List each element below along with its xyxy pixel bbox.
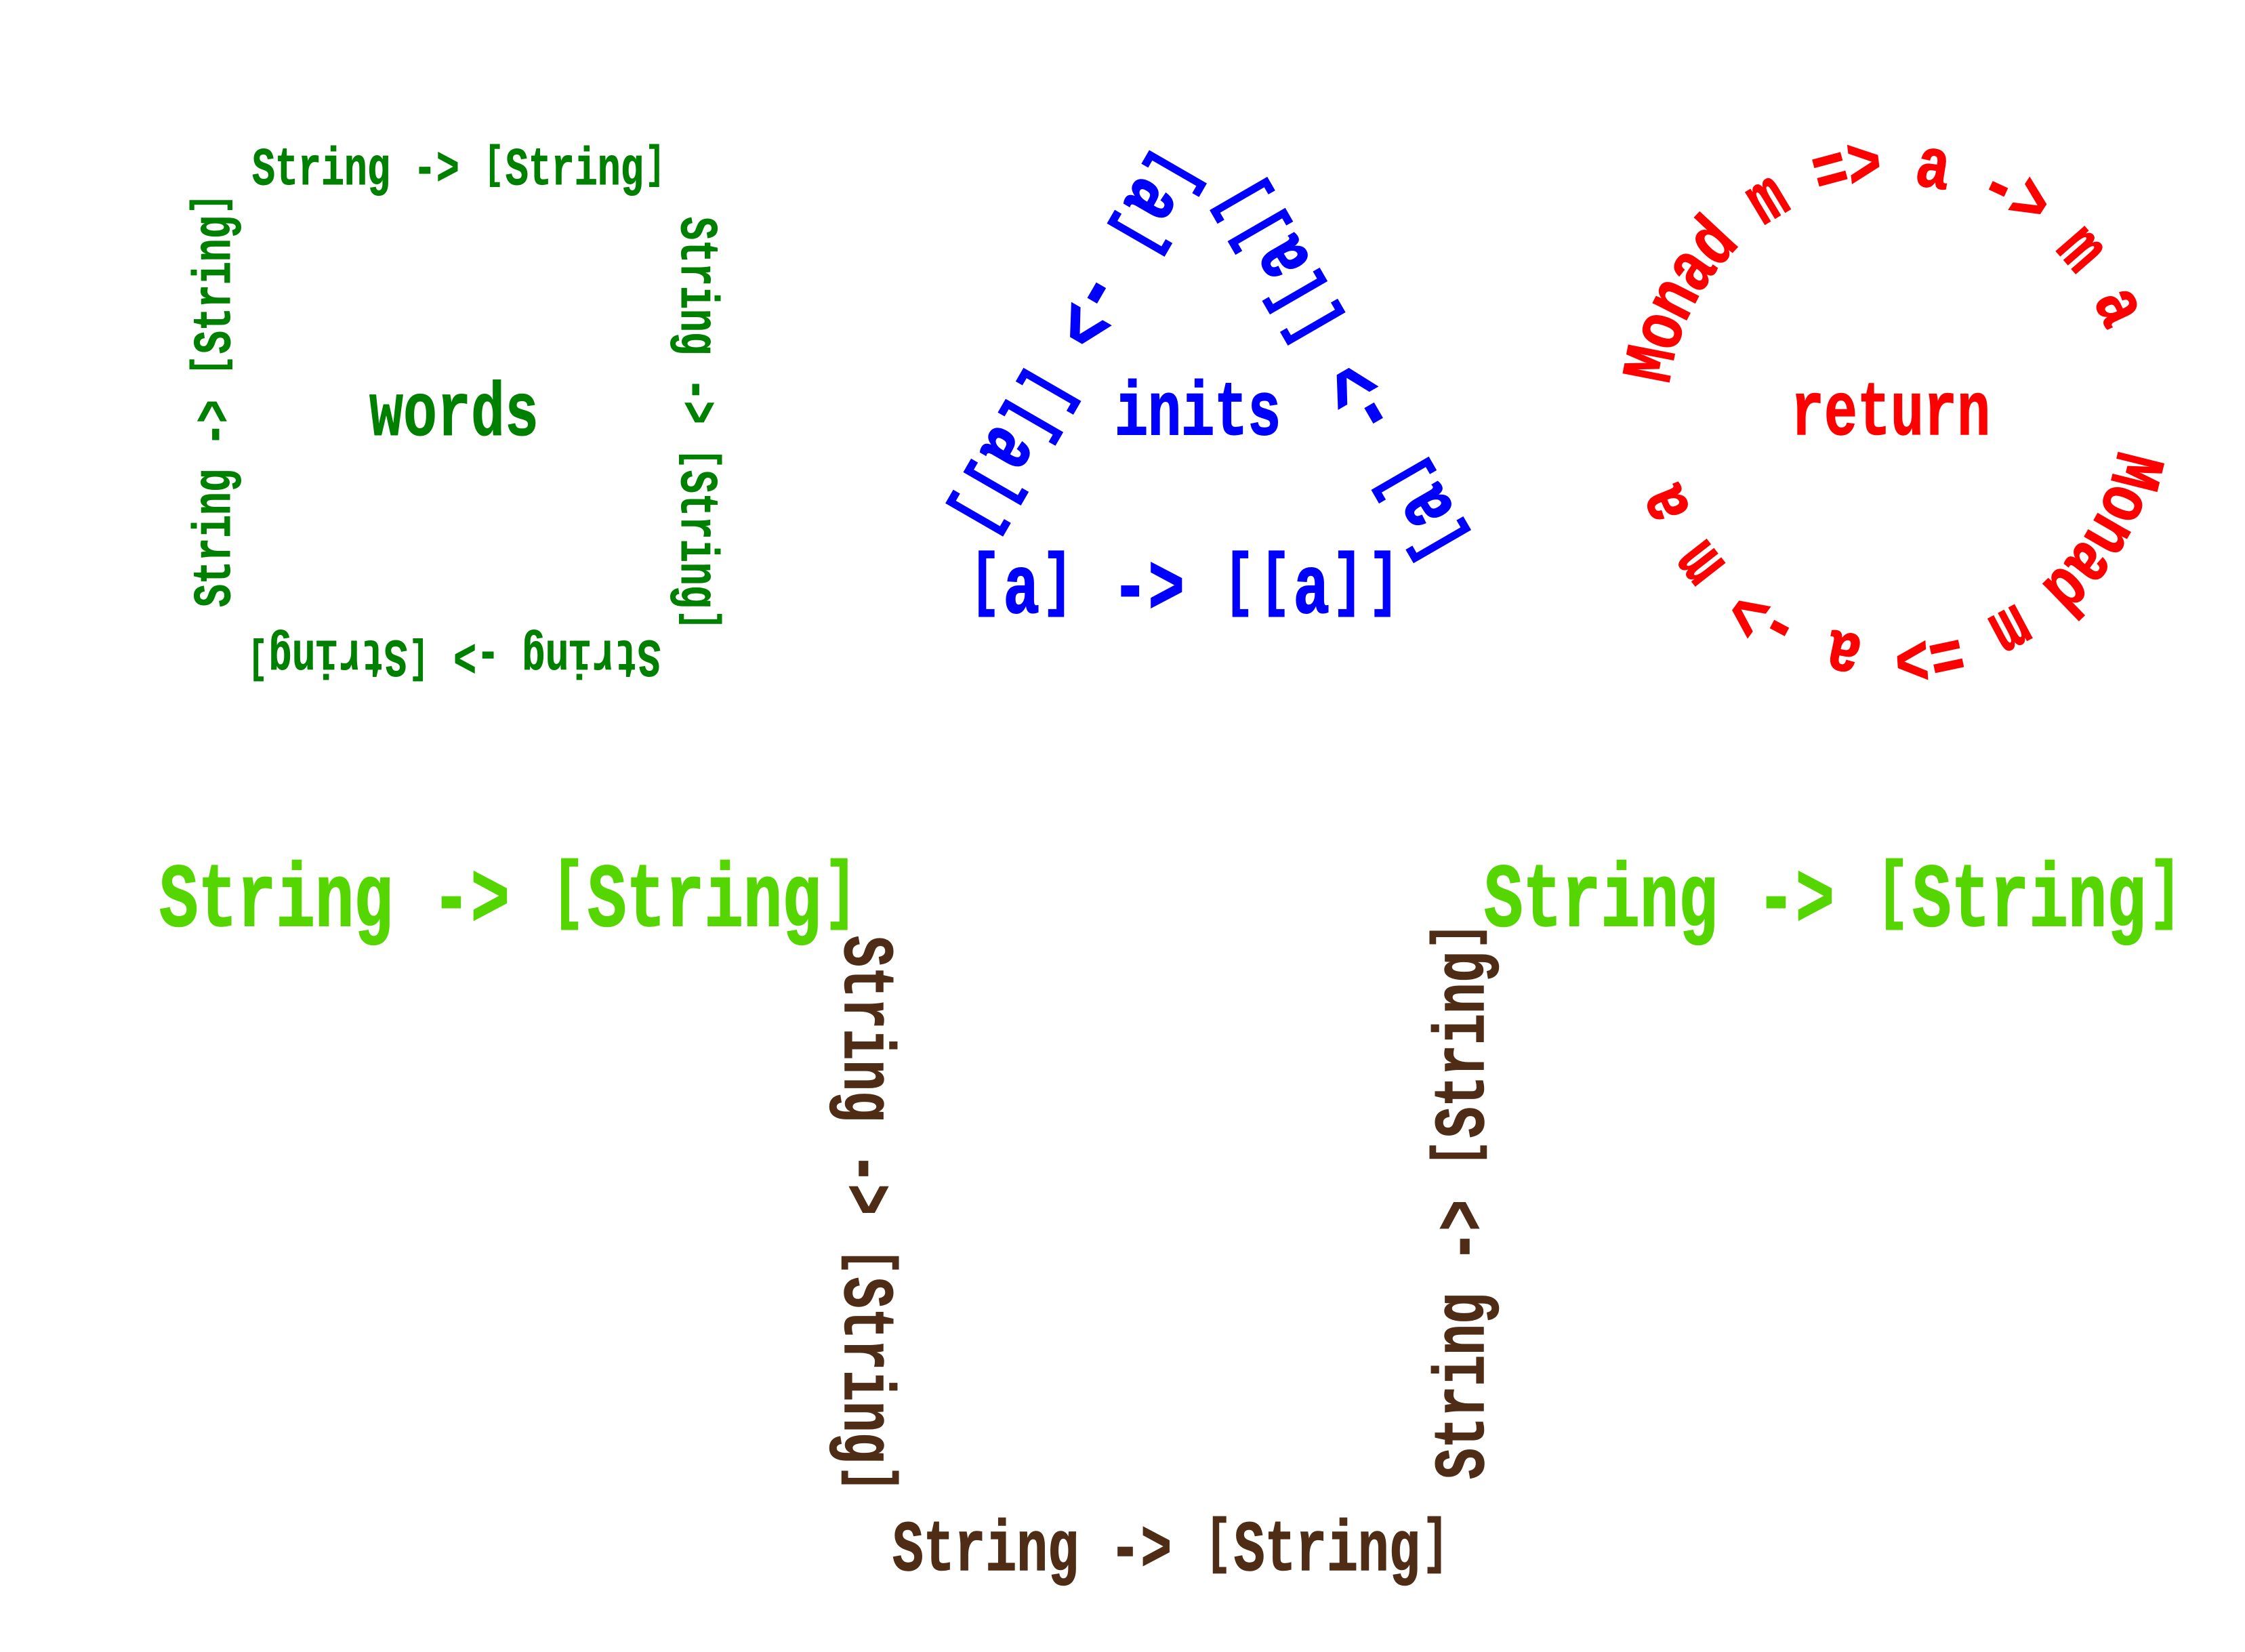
upper arc label: > <box>1843 125 1887 209</box>
left side label: a <box>1100 161 1200 239</box>
left side label: [ <box>989 388 1073 454</box>
lower arc label: m <box>1976 585 2044 672</box>
bottom side label: ] <box>1042 544 1073 623</box>
centre label: inits: inits <box>1115 371 1281 457</box>
right side label: [ <box>1272 290 1355 356</box>
brown horizontal label: ] <box>1422 1511 1449 1579</box>
left side label: [ <box>1007 357 1091 423</box>
upper arc label: = <box>1804 131 1858 218</box>
bottom side label: [ <box>409 634 428 684</box>
right side label: String -> <box>665 217 726 424</box>
upper arc label: m <box>2038 211 2122 289</box>
brown ascending label: String -> <box>1424 1200 1505 1479</box>
panel: words square <box>185 140 726 686</box>
upper arc label: d <box>1674 204 1756 284</box>
bottom side label: [ <box>1260 544 1290 623</box>
lower arc label: a <box>1819 608 1869 695</box>
upper arc label: - <box>1966 145 2031 232</box>
left side label: a <box>957 409 1056 487</box>
top side label: ] <box>645 141 665 191</box>
brown descending label: String <box>823 1277 905 1464</box>
brown descending label: [ <box>836 1249 904 1275</box>
right lime label: [ <box>1876 852 1909 937</box>
lower arc label: d <box>2025 547 2105 629</box>
brown ascending label: ] <box>1424 923 1493 949</box>
right side label: a <box>1378 467 1477 545</box>
left side label: ] <box>1097 201 1180 268</box>
brown descending label <box>823 936 905 1492</box>
brown ascending label <box>1424 923 1505 1479</box>
right lime label: ] <box>2149 852 2182 937</box>
right side label: a <box>1235 218 1334 297</box>
bottom side label: [ <box>1224 544 1254 623</box>
right side label: -> <box>1288 312 1441 483</box>
left side label: [ <box>186 356 236 375</box>
panel: inits triangle <box>922 132 1494 638</box>
left lime label: ] <box>824 852 857 937</box>
right side label: ] <box>1218 197 1302 263</box>
brown ascending label: [ <box>1424 1140 1493 1166</box>
upper arc label: a <box>2074 275 2161 340</box>
top side label: String <box>506 140 644 201</box>
left lime label: [ <box>552 852 584 937</box>
upper arc label: o <box>1619 302 1706 360</box>
lower arc label: n <box>2064 499 2151 569</box>
right lime label <box>1484 851 2182 953</box>
top side label: [ <box>485 141 503 191</box>
bottom side label: ] <box>1369 544 1399 623</box>
bottom side label: String -> <box>453 625 661 686</box>
left lime label: String <box>588 851 821 953</box>
brown ascending label: String <box>1424 951 1505 1138</box>
right side label: ] <box>1361 446 1445 512</box>
lower arc label <box>1623 445 2177 698</box>
left lime label: String -> <box>159 851 510 953</box>
lower arc label: o <box>2078 472 2166 535</box>
lower arc label: a <box>1623 472 1711 535</box>
lower arc label: - <box>1746 585 1813 672</box>
bottom side label: ] <box>1332 544 1363 623</box>
upper arc label <box>1611 125 2161 389</box>
upper arc label: > <box>1992 162 2065 249</box>
right side label: ] <box>675 610 725 629</box>
lower arc label: a <box>2046 524 2130 601</box>
upper arc label: n <box>1632 266 1719 333</box>
panel: composed chain <box>159 851 2182 1592</box>
right side label: [ <box>1397 508 1481 574</box>
left side label: ] <box>935 481 1019 547</box>
centre label: return: return <box>1791 371 1990 457</box>
bottom side label: a <box>1294 544 1330 638</box>
left side label: ] <box>953 450 1037 516</box>
bottom side label: [ <box>970 544 1000 623</box>
left side label: ] <box>186 194 236 214</box>
right side label: [ <box>675 449 725 468</box>
right side label: String <box>665 470 726 608</box>
top side label: String -> <box>252 140 459 201</box>
brown descending label: ] <box>836 1466 904 1492</box>
left side label: -> <box>1011 223 1164 394</box>
brown horizontal label <box>892 1510 1449 1592</box>
right side label: ] <box>1200 166 1283 232</box>
right lime label: String <box>1912 851 2146 953</box>
right side label: [ <box>1254 260 1338 325</box>
right lime label: String -> <box>1484 851 1834 953</box>
lower arc label: = <box>1920 608 1971 695</box>
upper arc label: m <box>1733 157 1804 244</box>
lower arc label: m <box>1659 524 1744 601</box>
left side label: [ <box>1133 140 1216 205</box>
bottom side label: ] <box>248 634 268 684</box>
upper arc label: M <box>1611 340 1696 389</box>
bottom side label: -> <box>1076 544 1221 638</box>
brown horizontal label: [ <box>1206 1511 1231 1579</box>
centre label: words: words <box>369 372 539 458</box>
brown horizontal label: String -> <box>892 1510 1172 1592</box>
lower arc label: > <box>1892 615 1932 698</box>
bottom side label: a <box>1004 544 1039 638</box>
upper arc label: a <box>1651 233 1736 308</box>
left side label: String <box>185 215 246 354</box>
lower arc label: > <box>1712 567 1788 653</box>
left side label: String -> <box>185 400 246 607</box>
panel: return circle <box>1611 125 2177 698</box>
lower arc label: M <box>2090 445 2177 497</box>
brown horizontal label: String <box>1234 1510 1420 1592</box>
brown descending label: String -> <box>823 936 905 1215</box>
bottom side label: String <box>269 625 407 686</box>
upper arc label: a <box>1910 126 1956 211</box>
left lime label <box>159 851 857 953</box>
